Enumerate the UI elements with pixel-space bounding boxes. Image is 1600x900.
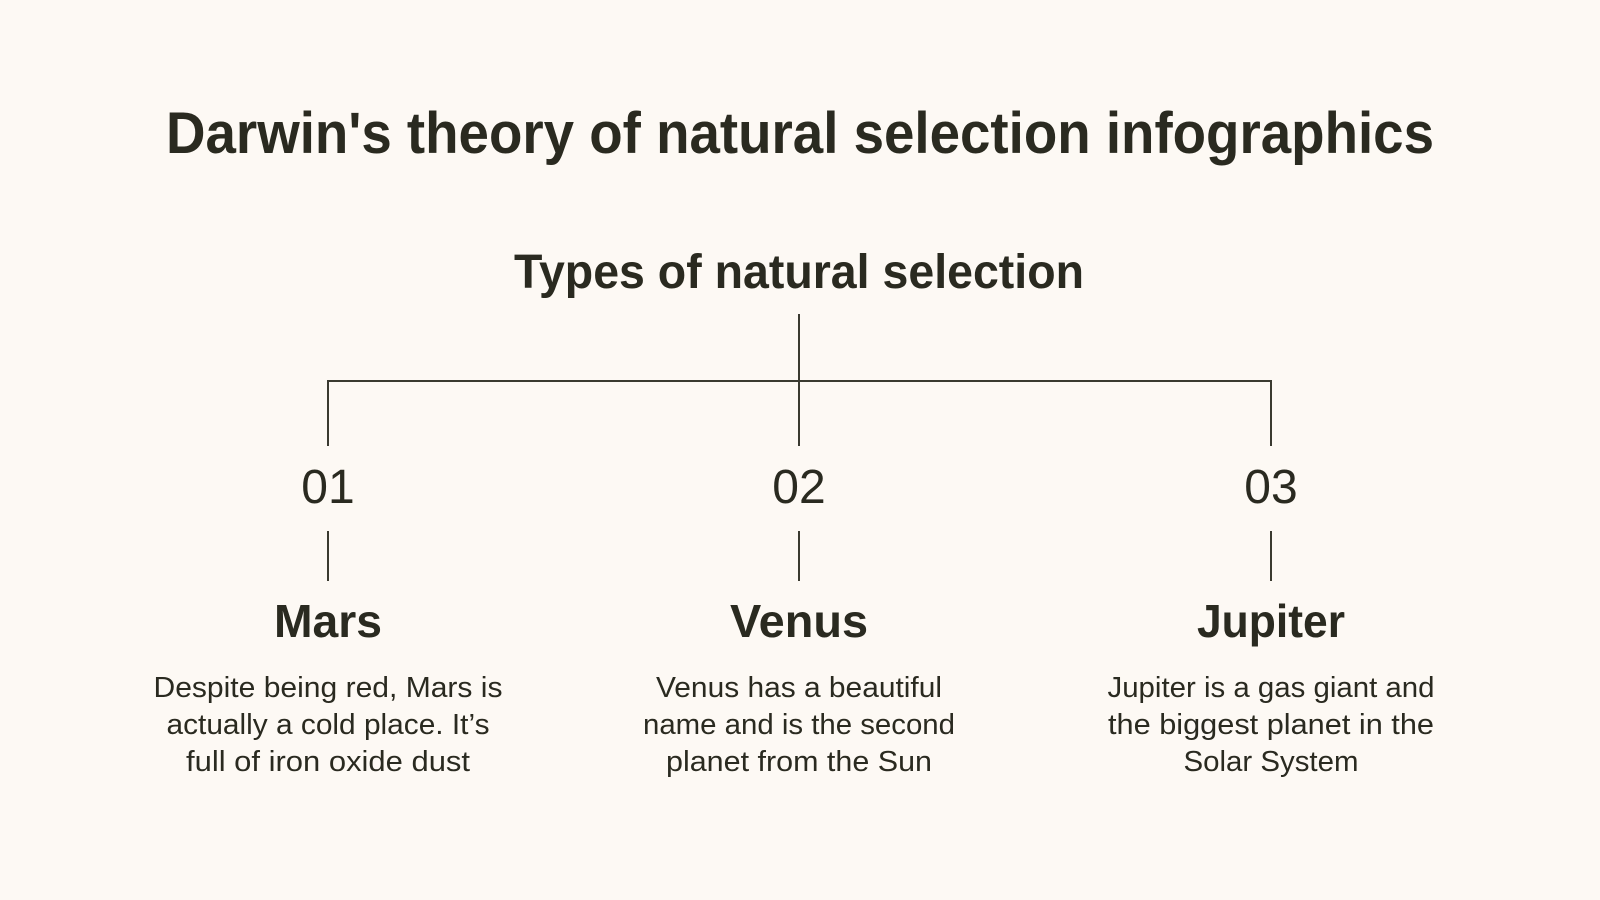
column: Jupiter: Jupiter: [1197, 595, 1345, 647]
column: Jupiter: the biggest planet in the: [1108, 709, 1434, 741]
column: Venus: Venus has a beautiful: [656, 672, 942, 704]
column: Mars: [154, 461, 502, 778]
column: Mars: full of iron oxide dust: [186, 746, 470, 778]
column: Jupiter: 03: [1244, 461, 1298, 514]
tree connector lines: [328, 314, 1271, 581]
column: Venus: planet from the Sun: [666, 746, 932, 778]
column: Venus: [643, 461, 955, 778]
column: Venus: Venus: [730, 595, 868, 647]
column: Mars: 01: [301, 461, 355, 514]
column: Mars: Despite being red, Mars is: [154, 672, 502, 704]
column: Jupiter: Jupiter is a gas giant and: [1108, 672, 1434, 704]
column: Jupiter: Solar System: [1184, 746, 1358, 778]
column: Venus: name and is the second: [643, 709, 955, 741]
column: Mars: actually a cold place. It’s: [166, 709, 490, 741]
column: Jupiter: [1108, 461, 1434, 778]
column: Venus: 02: [772, 461, 826, 514]
title: Darwin's theory of natural selection infographics: [166, 101, 1434, 166]
subtitle: Types of natural selection: [514, 246, 1084, 299]
column: Mars: Mars: [274, 595, 382, 647]
